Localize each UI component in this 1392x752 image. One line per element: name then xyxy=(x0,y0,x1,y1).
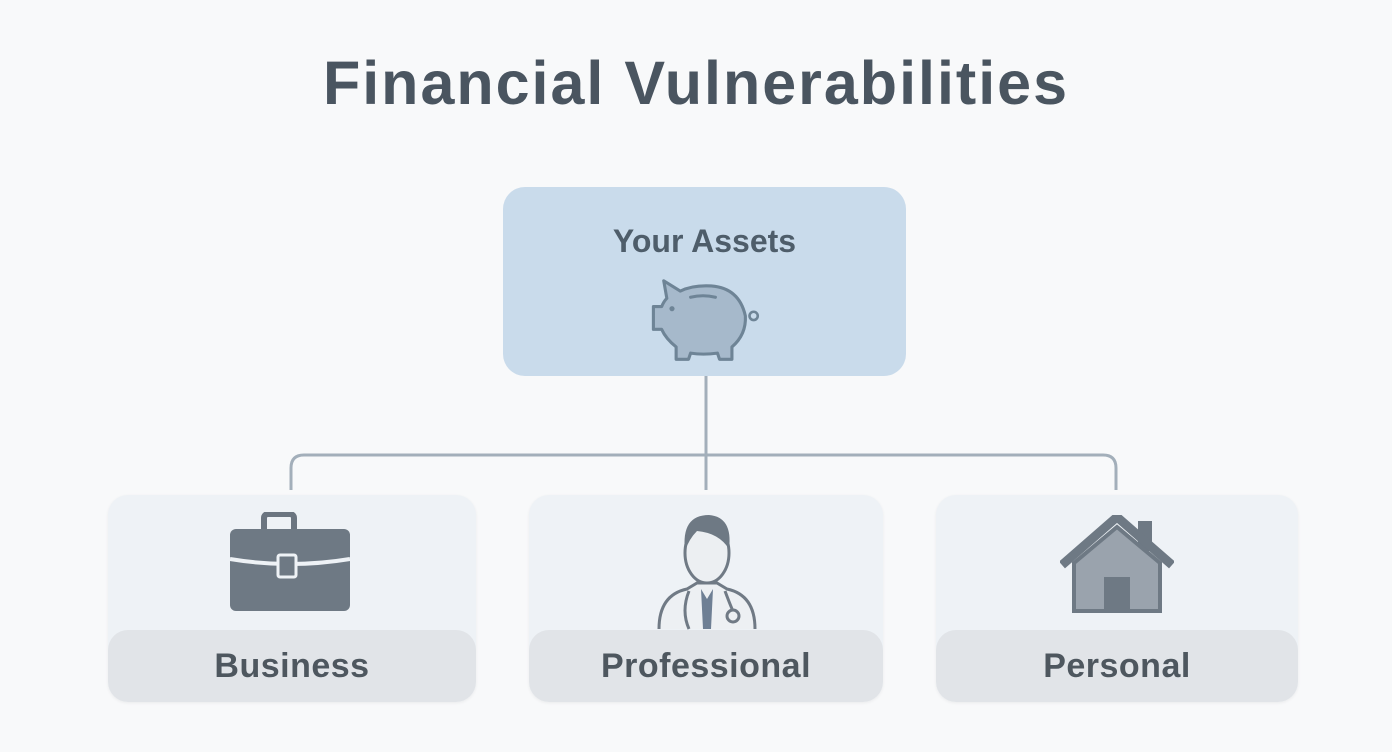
label: personal xyxy=(936,630,1298,702)
panel: professional xyxy=(529,495,883,702)
label: business xyxy=(108,630,476,702)
icon: briefcase xyxy=(230,512,350,611)
icon: house xyxy=(1060,515,1174,613)
title: Financial Vulnerabilities xyxy=(323,49,1069,117)
icon: doctor xyxy=(658,515,756,630)
label: personal: Personal xyxy=(1043,646,1191,684)
panel: your assets xyxy=(503,187,906,376)
panel: personal xyxy=(936,495,1298,702)
icon: piggy bank xyxy=(652,279,759,361)
label: professional xyxy=(529,630,883,702)
heading: your assets: Your Assets xyxy=(613,223,796,259)
panel: business xyxy=(108,495,476,702)
label: business: Business xyxy=(214,646,370,684)
label: professional: Professional xyxy=(601,646,811,684)
